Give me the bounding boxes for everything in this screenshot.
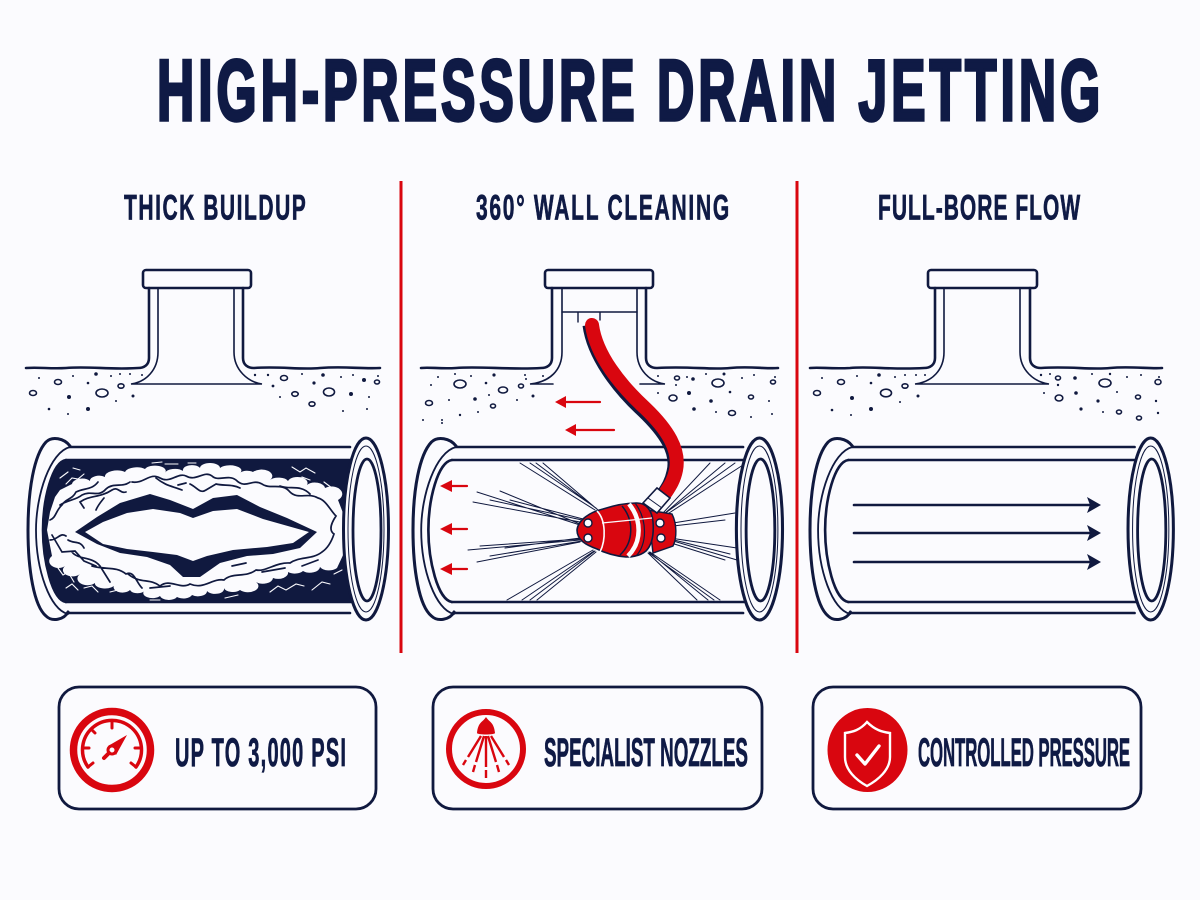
card: controlled pressure xyxy=(813,687,1141,809)
clear pipe body xyxy=(810,438,1173,620)
label: CONTROLLED PRESSURE xyxy=(918,731,1130,775)
manhole access shaft xyxy=(26,270,380,384)
soil particles xyxy=(422,372,776,424)
crack lines in deposit xyxy=(50,474,336,588)
icon: spray nozzle xyxy=(449,712,523,786)
label: UP TO 3,000 PSI xyxy=(175,729,346,775)
panel: thick buildup xyxy=(26,270,388,620)
buildup deposit xyxy=(43,460,352,602)
manhole access shaft xyxy=(810,270,1162,384)
title: HIGH-PRESSURE DRAIN JETTING xyxy=(157,44,1100,140)
soil particles xyxy=(814,373,1161,420)
red hose xyxy=(590,325,677,494)
heading: 360 wall cleaning: 360° WALL CLEANING xyxy=(476,189,729,228)
pipe with buildup xyxy=(28,438,388,620)
panel: full-bore flow xyxy=(810,270,1173,620)
card: specialist nozzles xyxy=(433,687,762,809)
red flow arrows xyxy=(440,396,614,575)
manhole access shaft xyxy=(421,270,778,384)
flow arrows xyxy=(854,497,1101,570)
heading: thick buildup: THICK BUILDUP xyxy=(124,189,306,228)
icon: shield with check xyxy=(828,708,908,792)
soil particles xyxy=(30,372,380,415)
water spray jets xyxy=(468,463,743,600)
card: up to 3,000 psi xyxy=(59,687,376,809)
heading: full-bore flow: FULL-BORE FLOW xyxy=(878,189,1081,228)
white flecks in dark corners xyxy=(58,462,342,600)
label: SPECIALIST NOZZLES xyxy=(544,730,748,775)
icon: pressure gauge xyxy=(74,712,150,788)
panel: 360 wall cleaning xyxy=(413,270,783,620)
nozzle head xyxy=(577,488,676,557)
clean pipe body xyxy=(413,438,783,620)
